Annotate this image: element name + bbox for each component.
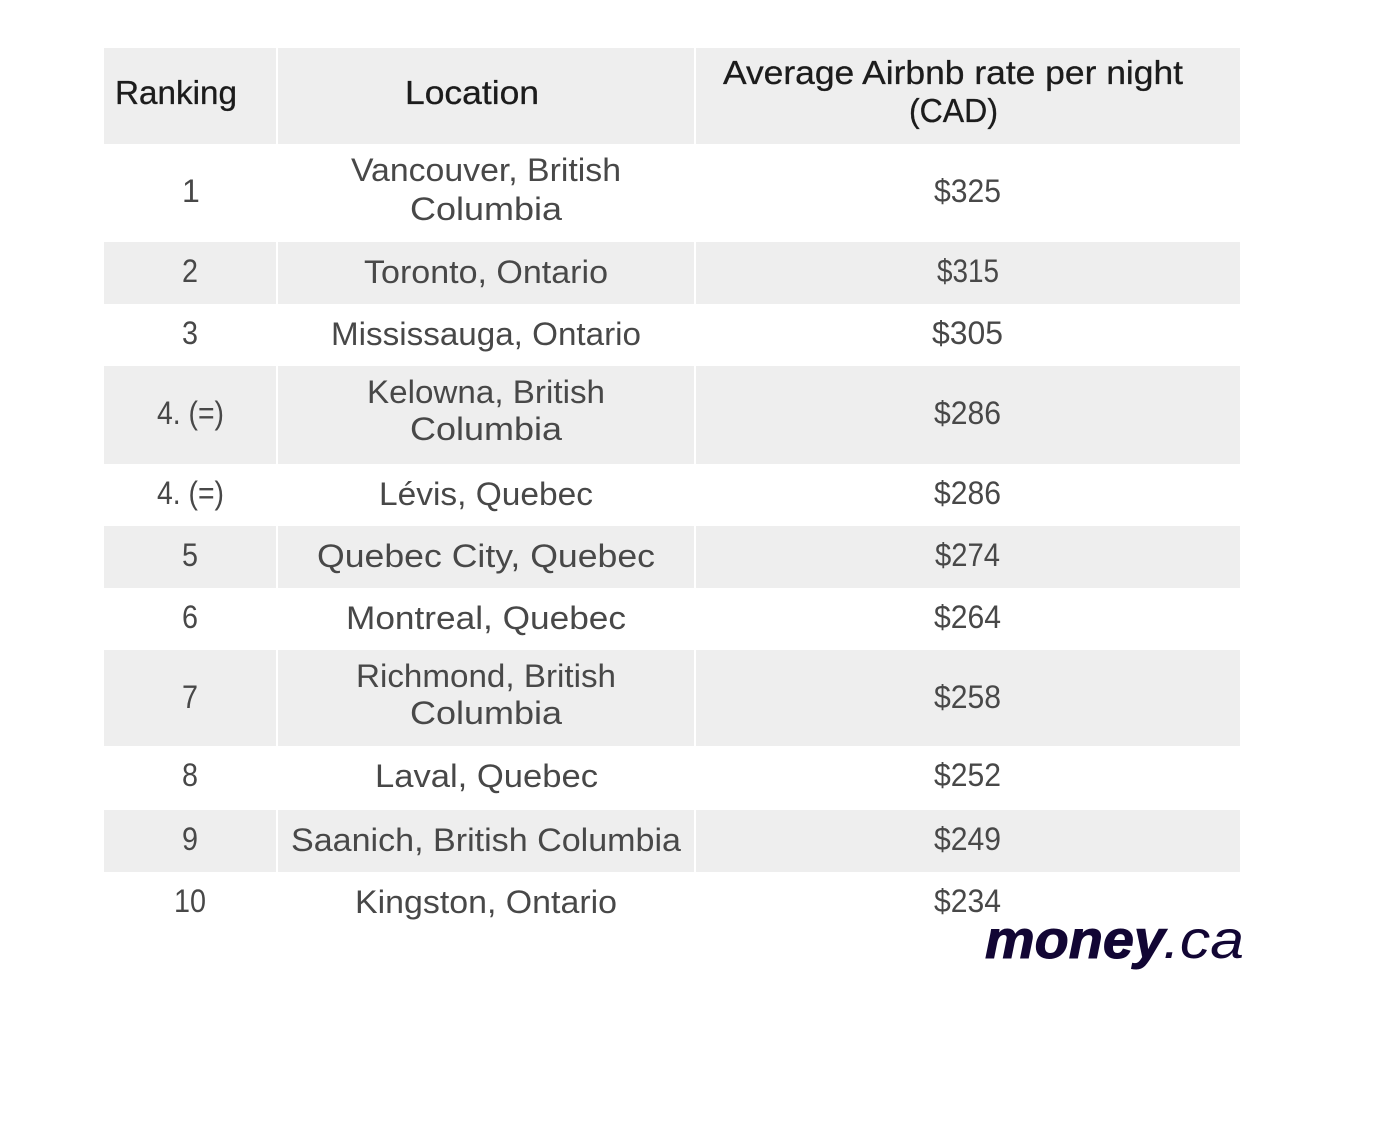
row 8: Richmond: 7: [182, 679, 198, 715]
row 5: Lévis: Lévis, Quebec: [379, 476, 593, 512]
row 2: Toronto: Toronto, Ontario: [364, 254, 608, 290]
row 5: Lévis: 4. (=): [157, 475, 224, 511]
logo: money.ca: .ca: [1163, 910, 1244, 970]
row 4: Kelowna: Columbia: [410, 411, 562, 447]
table header row: Average Airbnb rate per night: [723, 54, 1183, 91]
row 10: Saanich: Saanich, British Columbia: [291, 822, 681, 858]
row 3: Mississauga: Mississauga, Ontario: [331, 316, 641, 352]
row 9: Laval: $252: [934, 757, 1001, 793]
row 1: Vancouver: $325: [934, 173, 1001, 209]
row 6: Quebec City: 5: [182, 537, 198, 573]
row 4: Kelowna: Kelowna, British: [367, 374, 605, 410]
row 9: Laval: Laval, Quebec: [375, 758, 598, 794]
logo: money.ca: [985, 910, 1244, 970]
row 2: Toronto: 2: [182, 253, 198, 289]
row 1: Vancouver: [182, 152, 1001, 227]
row 7: Montreal: 6: [182, 599, 198, 635]
row 9: Laval: [182, 757, 1001, 794]
row 2: Toronto: [104, 242, 1240, 304]
row 11: Kingston: 10: [174, 883, 206, 919]
logo: money.ca: money: [985, 910, 1168, 970]
row 5: Lévis: $286: [934, 475, 1001, 511]
row 10: Saanich: [104, 810, 1240, 872]
row 8: Richmond: $258: [934, 679, 1001, 715]
row 8: Richmond: Columbia: [410, 695, 562, 731]
row 11: Kingston: Kingston, Ontario: [355, 884, 617, 920]
row 6: Quebec City: $274: [935, 537, 1000, 573]
row 4: Kelowna: $286: [934, 395, 1001, 431]
table header row: Ranking: [115, 74, 237, 111]
row 11: Kingston: $234: [934, 883, 1001, 919]
row 3: Mississauga: 3: [182, 315, 198, 351]
row 7: Montreal: $264: [934, 599, 1001, 635]
table header row: Location: [405, 74, 539, 111]
row 6: Quebec City: [104, 526, 1240, 588]
row 5: Lévis: [157, 475, 1001, 512]
row 8: Richmond: Richmond, British: [356, 658, 616, 694]
row 1: Vancouver: Vancouver, British: [351, 152, 621, 188]
row 6: Quebec City: Quebec City, Quebec: [317, 538, 655, 574]
row 1: Vancouver: 1: [182, 173, 200, 209]
row 4: Kelowna: 4. (=): [157, 395, 224, 431]
row 3: Mississauga: [182, 315, 1003, 352]
row 4: Kelowna: [104, 366, 1240, 464]
row 2: Toronto: $315: [937, 253, 999, 289]
row 7: Montreal: Montreal, Quebec: [346, 600, 626, 636]
row 10: Saanich: $249: [934, 821, 1001, 857]
row 3: Mississauga: $305: [932, 315, 1003, 351]
row 1: Vancouver: Columbia: [410, 191, 562, 227]
table header row: (CAD): [909, 92, 998, 129]
row 7: Montreal: [182, 599, 1001, 636]
row 10: Saanich: 9: [182, 821, 198, 857]
row 9: Laval: 8: [182, 757, 198, 793]
row 11: Kingston: [174, 883, 1001, 920]
row 8: Richmond: [104, 650, 1240, 746]
table header row: [104, 48, 1240, 144]
